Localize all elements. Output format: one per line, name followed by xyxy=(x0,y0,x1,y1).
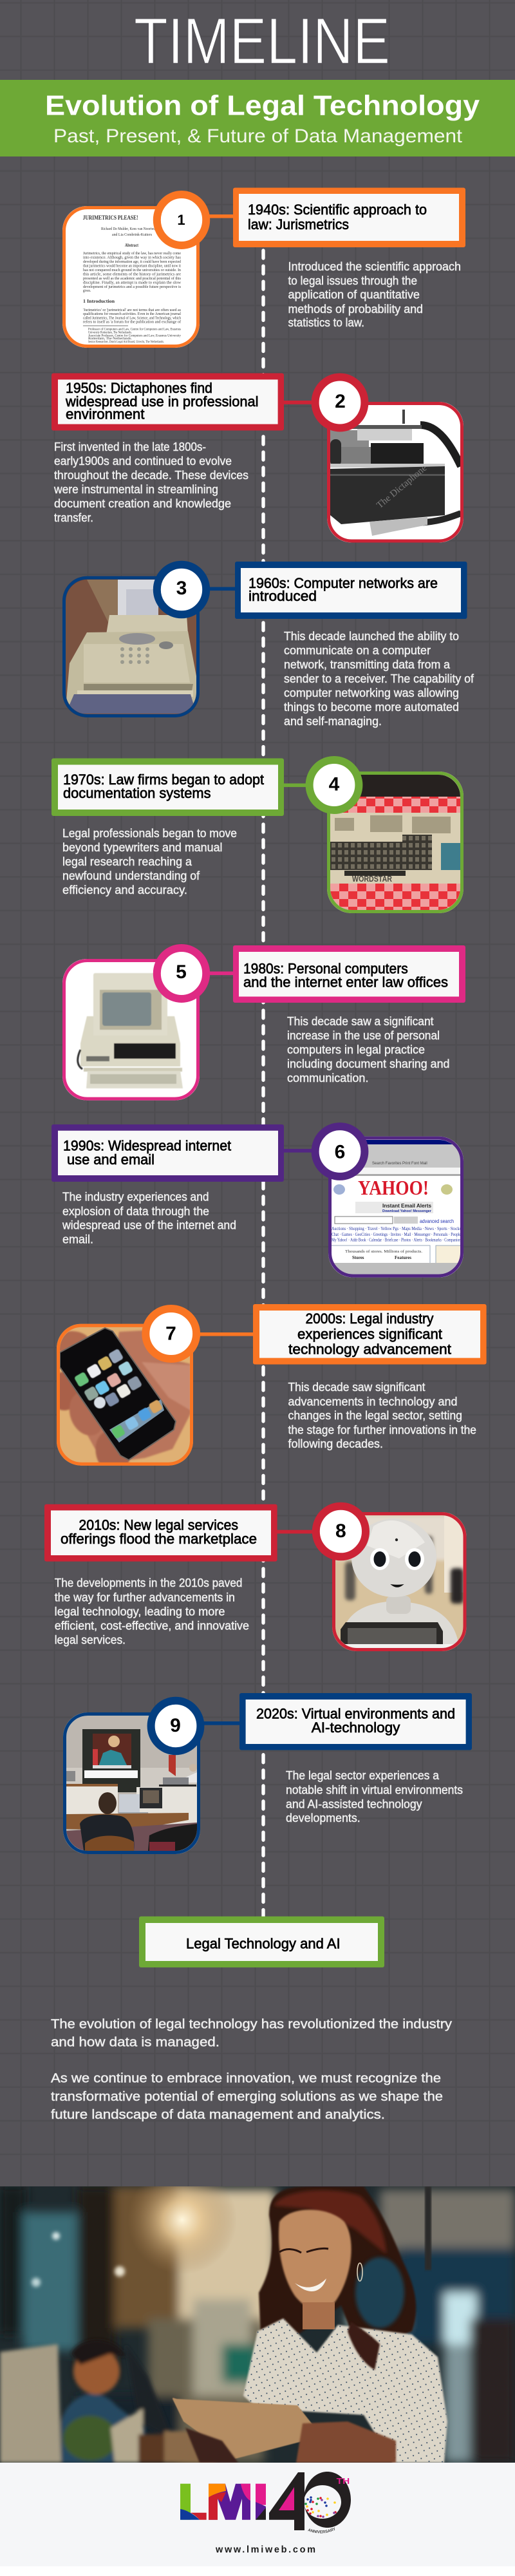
description: sender to a receiver. The capability of xyxy=(284,672,474,685)
heading box xyxy=(52,1124,284,1182)
number badge 5: 5 xyxy=(176,961,187,983)
description: The legal sector experiences a xyxy=(286,1769,440,1782)
description: explosion of data through the xyxy=(62,1205,209,1218)
connector xyxy=(283,401,315,404)
image: Yahoo home page xyxy=(327,1137,465,1278)
image: Jurimetrics paper: into existence. Although, given the way in which society has xyxy=(83,256,182,260)
milestone 7: 2000s xyxy=(49,1304,487,1478)
green banner xyxy=(0,80,515,156)
description xyxy=(62,827,237,896)
image: Yahoo home page: Instant Email Alerts xyxy=(382,1203,432,1209)
image: Jurimetrics paper: developed during the information age, it could have been expected xyxy=(83,260,181,264)
milestone 3: 1960s xyxy=(62,562,474,728)
image: Jurimetrics paper: has not conquered much ground in the universities or outside. In xyxy=(83,269,181,272)
image: Yahoo home page: Stores xyxy=(352,1255,364,1260)
description: including document sharing and xyxy=(287,1057,449,1070)
image: word processor keyboard xyxy=(327,772,464,913)
image: dictaphone: The Dictaphone xyxy=(375,463,429,511)
description: to legal issues through the xyxy=(288,274,417,287)
image: Jurimetrics paper: and Lia Combrink-Kuiters xyxy=(112,232,152,237)
image: Yahoo home page: Thousands of stores. Millions of products. xyxy=(345,1249,422,1254)
number badge 1 xyxy=(157,194,206,245)
description: legal services. xyxy=(55,1633,126,1646)
description xyxy=(288,1381,476,1450)
closing text: The evolution of legal technology has revolutionized the industry xyxy=(51,2018,452,2032)
4 xyxy=(269,2472,304,2530)
image: Jurimetrics paper: refers to itself as 'a forum for the publication and exchange of xyxy=(83,319,181,325)
image: Jurimetrics paper: Abstract xyxy=(125,243,139,248)
image: Jurimetrics paper: that jurimetrics would become an important discipline, until now it xyxy=(83,264,181,268)
number badge 8 xyxy=(316,1506,366,1557)
connector xyxy=(283,1149,315,1153)
image: personal computer xyxy=(62,959,200,1101)
description: and self-managing. xyxy=(284,715,382,728)
heading box: 1970s: Law firms began to adopt xyxy=(63,772,265,788)
image: Jurimetrics paper: 'Jurimetrics' or 'jurimetrical' are not terms that are often used as xyxy=(83,308,182,312)
I xyxy=(256,2484,266,2520)
connector xyxy=(206,587,237,591)
connector xyxy=(206,214,235,218)
description: changes in the legal sector, setting xyxy=(288,1409,462,1422)
closing text: transformative potential of emerging solutions as we shape the xyxy=(51,2090,443,2104)
heading box: 1940s: Scientific approach to xyxy=(248,202,427,218)
man at desk xyxy=(61,2394,145,2463)
heading box: 1990s: Widespread internet xyxy=(63,1137,232,1153)
description: things to become more automated xyxy=(284,701,459,714)
heading box: environment xyxy=(66,406,145,422)
final box: Legal Technology and AI xyxy=(139,1917,384,1967)
heading box: introduced xyxy=(248,588,317,604)
number badge 7: 7 xyxy=(165,1323,176,1345)
image: Yahoo home page: My Yahoo! · Addr Book · Calendar · Briefcase · Photos · Alerts · Bookmarks · Companion xyxy=(332,1236,461,1243)
image: humanoid robot xyxy=(332,1512,466,1651)
description: legal technology, leading to more xyxy=(55,1605,225,1618)
number badge 9 xyxy=(151,1701,200,1751)
heading box: law: Jurismetrics xyxy=(248,216,349,232)
number badge 9: 9 xyxy=(170,1715,181,1736)
description: The developments in the 2010s paved xyxy=(55,1577,242,1589)
image: virtual courtroom xyxy=(63,1712,200,1854)
anniversary label: ANNIVERSARY xyxy=(308,2527,335,2533)
number badge 4 xyxy=(310,760,359,810)
woman xyxy=(173,2186,447,2463)
milestone 8: 2010s xyxy=(44,1504,466,1651)
footer band xyxy=(0,2463,515,2566)
description: beyond typewriters and manual xyxy=(62,841,223,854)
timeline dashed line xyxy=(261,251,265,1917)
description xyxy=(284,630,474,728)
description: communicate on a computer xyxy=(284,644,431,657)
heading box: technology advancement xyxy=(288,1341,452,1358)
description xyxy=(55,1577,249,1646)
description: widespread use of the internet and xyxy=(62,1219,236,1232)
heading box xyxy=(44,1504,277,1562)
milestone 6: 1990s xyxy=(52,1124,465,1278)
description: developments. xyxy=(286,1812,360,1824)
image: Jurimetrics paper: development of jurimetrics and a possible future perspective is xyxy=(83,285,182,289)
image: Jurimetrics paper: 1 Introduction xyxy=(83,299,115,304)
image: Jurimetrics paper: discipline. Finally, an attempt is made to explain the slow xyxy=(83,281,182,285)
milestone 4: 1970s xyxy=(52,759,464,913)
description: This decade launched the ability to xyxy=(284,630,459,643)
description: newfound understanding of xyxy=(62,869,200,882)
title: TIMELINE xyxy=(134,5,390,77)
heading box: use and email xyxy=(67,1151,154,1168)
heading box xyxy=(52,759,284,816)
connector xyxy=(276,1530,315,1533)
number badge 6: 6 xyxy=(335,1142,345,1163)
number badge 2: 2 xyxy=(335,391,346,412)
website url: www.lmiweb.com xyxy=(215,2545,315,2555)
tablet xyxy=(173,2398,322,2459)
description: early1900s and continued to evolve xyxy=(54,455,232,468)
image: Jurimetrics paper: called Jurimetrics, The Journal of Law, Science, and Technology, which xyxy=(83,316,181,321)
heading box: widespread use in professional xyxy=(65,393,259,410)
heading box: 2000s: Legal industry xyxy=(305,1311,434,1327)
description: computers in legal practice xyxy=(287,1043,425,1056)
glow xyxy=(133,2186,232,2269)
closing text: As we continue to embrace innovation, we must recognize the xyxy=(51,2072,441,2086)
heading box: 2010s: New legal services xyxy=(79,1517,238,1533)
heading box xyxy=(239,1693,472,1750)
image: dictaphone xyxy=(327,402,464,542)
description: efficiency and accuracy. xyxy=(62,884,187,896)
image: Yahoo home page: advanced search xyxy=(420,1218,454,1224)
description: Legal professionals began to move xyxy=(62,827,237,840)
number badge 7 xyxy=(145,1309,196,1359)
number badge 5 xyxy=(157,948,206,999)
description: application of quantitative xyxy=(288,289,420,301)
image: Jurimetrics paper: University Rotterdam, The Netherlands. xyxy=(88,331,132,335)
number badge 8: 8 xyxy=(335,1520,346,1542)
image: Yahoo home page: Features xyxy=(395,1255,411,1260)
description: communication. xyxy=(287,1072,368,1084)
heading box xyxy=(235,562,467,619)
image: Yahoo home page: Chat · Games · GeoCities · Greetings · Invites · Mail · Messenger · Personals · People xyxy=(332,1231,462,1237)
connector xyxy=(283,783,310,787)
banner heading: Evolution of Legal Technology xyxy=(45,90,480,121)
image: smartphone in hand xyxy=(57,1324,193,1466)
description: statistics to law. xyxy=(288,316,364,329)
heading box xyxy=(253,1304,487,1365)
number badge 3 xyxy=(157,565,206,614)
heading box: 1950s: Dictaphones find xyxy=(66,380,212,396)
image: Jurimetrics paper: this article, some elements of the history of jurimetrics are xyxy=(83,272,181,277)
heading box: 1980s: Personal computers xyxy=(243,960,408,976)
connector xyxy=(196,1332,254,1336)
image: Jurimetrics paper: given. xyxy=(83,289,91,293)
connector xyxy=(206,971,235,975)
image: Jurimetrics paper: Professor of Computers and Law, Centre for Computers and Law, Erasmus xyxy=(88,328,181,331)
milestone 1: 1940s xyxy=(62,188,465,348)
description: throughout the decade. These devices xyxy=(54,469,248,482)
40th superscript: TH xyxy=(337,2476,350,2486)
heading box xyxy=(233,945,465,1003)
description: and AI-assisted technology xyxy=(286,1798,422,1811)
description: This decade saw a significant xyxy=(287,1015,434,1028)
heading box: and the internet enter law offices xyxy=(243,974,448,990)
logo: LMI 40th anniversary xyxy=(180,2472,351,2533)
description: increase in the use of personal xyxy=(287,1029,440,1042)
number badge 6 xyxy=(315,1126,364,1177)
heading box: documentation systems xyxy=(63,785,211,801)
milestone 5: 1980s xyxy=(62,945,465,1101)
image: Jurimetrics paper: Richard De Mulder, Kees van Noortwijk xyxy=(101,227,158,231)
image: Jurimetrics paper: presented as well as the academic and practical potential of this xyxy=(83,276,182,281)
0 xyxy=(304,2472,351,2528)
number badge 4: 4 xyxy=(329,774,340,795)
connector xyxy=(201,1721,241,1725)
image: Jurimetrics paper: Rotterdam, The Netherlands. xyxy=(88,337,132,341)
image: Jurimetrics paper: Senior Researcher, Dutch Legal Aid Board, Utrecht, The Netherlands. xyxy=(88,341,164,344)
closing text: future landscape of data management and analytics. xyxy=(51,2108,385,2122)
heading box: offerings flood the marketplace xyxy=(61,1531,257,1547)
number badge 1: 1 xyxy=(177,212,185,228)
closing text xyxy=(51,2018,452,2122)
description: transfer. xyxy=(54,511,93,524)
description xyxy=(53,440,248,524)
description: the way for further advancements in xyxy=(55,1591,235,1604)
description: document creation and knowledge xyxy=(54,497,231,510)
description: email. xyxy=(62,1233,93,1246)
M xyxy=(209,2484,250,2520)
plant xyxy=(63,2416,117,2461)
heading box: experiences significant xyxy=(297,1326,443,1342)
description xyxy=(288,260,461,329)
image: Yahoo home page: Auctions · Shopping · Travel · Yellow Pgs · Maps Media · News · Sports · Stocks xyxy=(332,1226,461,1231)
heading box: 2020s: Virtual environments and xyxy=(256,1706,455,1722)
description: advancements in technology and xyxy=(288,1395,457,1408)
image: Jurimetrics paper: Associate Professor, Centre for Computers and Law, Erasmus University xyxy=(88,335,182,337)
description: notable shift in virtual environments xyxy=(286,1783,463,1796)
milestone 9: 2020s xyxy=(63,1693,472,1854)
description: computer networking was allowing xyxy=(284,687,459,699)
banner subheading: Past, Present, & Future of Data Management xyxy=(53,126,463,147)
final box: Legal Technology and AI: Legal Technology and AI xyxy=(186,1936,341,1952)
description: This decade saw significant xyxy=(288,1381,425,1394)
description: legal research reaching a xyxy=(62,855,192,868)
description: following decades. xyxy=(288,1437,383,1450)
image: Jurimetrics paper: Jurimetrics, the empirical study of the law, has never really come xyxy=(83,251,181,256)
image: Yahoo home page: Search Favorites Print Font Mail xyxy=(372,1162,427,1166)
description: The industry experiences and xyxy=(62,1191,209,1204)
image: Jurimetrics paper xyxy=(62,206,200,348)
image: fax machine xyxy=(62,576,200,717)
image: Jurimetrics paper: qualifications for research activities. Even in the American journal xyxy=(83,312,181,316)
monitor xyxy=(0,2344,61,2463)
description: were instrumental in streamlining xyxy=(53,483,218,496)
description xyxy=(286,1769,463,1824)
heading box: 1960s: Computer networks are xyxy=(248,575,438,591)
heading box xyxy=(233,188,465,247)
closing text: and how data is managed. xyxy=(51,2035,220,2049)
L xyxy=(180,2484,207,2520)
image: Yahoo home page: YAHOO! xyxy=(358,1176,429,1199)
description: the stage for further innovations in the xyxy=(288,1423,476,1436)
heading box xyxy=(52,374,284,430)
number badge 3: 3 xyxy=(176,578,187,599)
image: Yahoo home page: Download Yahoo! Messenger xyxy=(382,1209,432,1213)
description: efficient, cost-effective, and innovative xyxy=(55,1620,249,1633)
image: word processor keyboard: WORDSTAR xyxy=(352,875,392,884)
description: methods of probability and xyxy=(288,303,423,316)
description xyxy=(62,1191,236,1246)
heading box: AI-technology xyxy=(312,1719,400,1736)
description xyxy=(287,1015,449,1084)
milestone 2: 1950s xyxy=(52,374,464,542)
number badge 2 xyxy=(315,377,364,428)
description: First invented in the late 1800s- xyxy=(54,440,206,453)
description: Introduced the scientific approach xyxy=(288,260,461,273)
bottom photo: woman with tablet xyxy=(0,2165,515,2463)
description: network, transmitting data from a xyxy=(284,658,451,671)
image: Jurimetrics paper: JURIMETRICS PLEASE! xyxy=(83,215,138,222)
